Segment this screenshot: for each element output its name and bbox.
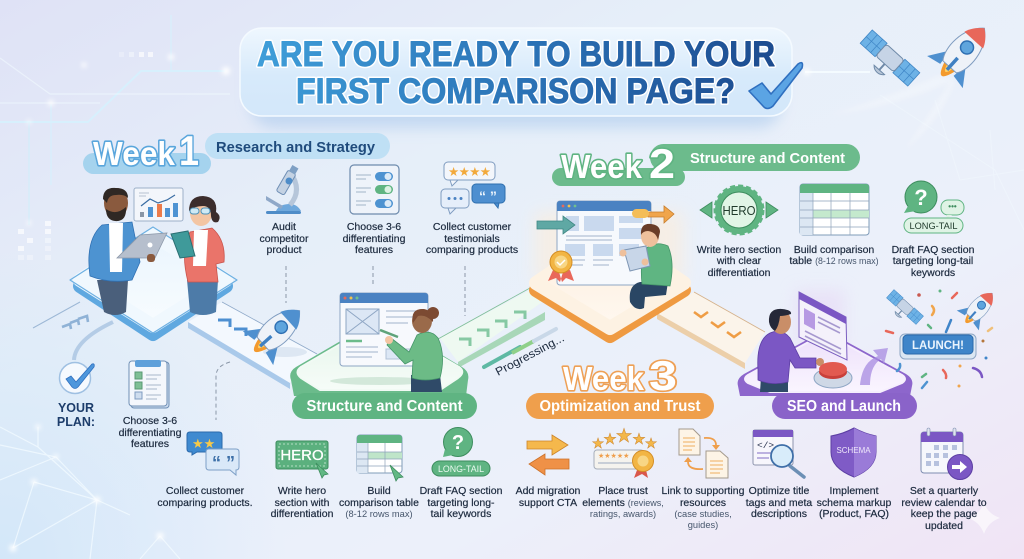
step: title tags: [746, 430, 812, 520]
step: comparison table: (8-12 rows max): [345, 509, 413, 519]
week 1 heading: Research and Strategy: [216, 139, 376, 156]
step: quarterly review: keep the page: [911, 508, 977, 520]
step: draft FAQ section: targeting long-tail: [893, 255, 973, 267]
title text: ARE YOU READY TO BUILD YOUR: [257, 35, 775, 74]
week 2 heading: [552, 140, 860, 187]
icon: toggle card: [350, 165, 399, 214]
your plan: YOUR: [58, 401, 94, 415]
step: supporting resources: Link to supporting: [662, 485, 745, 497]
step: FAQ section: targeting long-: [427, 497, 495, 509]
icon: chat bubbles: ★★: [192, 436, 215, 451]
step: trust elements: Place trust: [598, 485, 648, 497]
icon: review bubbles: “ ”: [479, 188, 497, 204]
step: audit competitor: Audit: [272, 221, 296, 233]
icon: swap arrows: [527, 435, 569, 475]
panel: structure and content label: Structure and Content: [306, 398, 462, 415]
launch celebration: [882, 283, 1003, 388]
icon: calendar with arrow: [921, 428, 972, 480]
step: comparison table: [339, 435, 419, 519]
step: hero section: section with: [275, 497, 330, 509]
illustration: woman drawing on window: [380, 307, 443, 392]
icon: medal: [548, 251, 574, 282]
icon: hero badge: HERO: [722, 204, 756, 218]
icon: linked documents: [679, 429, 728, 478]
step: trust elements: ratings, awards): [590, 509, 656, 519]
step: migration CTA: [516, 435, 581, 509]
step: plan features: [119, 360, 182, 450]
icon: stars and award: [592, 426, 657, 478]
step: plan features: features: [131, 438, 169, 450]
step: trust elements: elements (reviews,: [582, 497, 664, 509]
panel: SEO and launch label: [772, 393, 917, 419]
week 1 heading: 1: [179, 127, 199, 174]
title text: ARE YOU READY TO BUILD YOUR: [257, 35, 775, 74]
title text: FIRST COMPARISON PAGE?: [296, 72, 735, 111]
illustration: man with tablet: [620, 224, 672, 309]
step: quarterly review: Set a quarterly: [910, 485, 979, 497]
icon: table: [357, 435, 403, 481]
icon: clipboard: [129, 360, 169, 408]
step: title tags: descriptions: [751, 508, 807, 520]
icon: question bubble: [432, 428, 490, 476]
icon: FAQ bubbles: LONG-TAIL: [910, 221, 958, 232]
step: supporting resources: resources: [680, 497, 726, 509]
platform: week 3 purple: [738, 290, 912, 396]
connector: week 1 to week 2: [188, 302, 317, 389]
icon: FAQ bubbles: ?: [914, 185, 928, 210]
icon: plan check circle: [60, 362, 94, 394]
icon: stars and award: ★: [615, 426, 633, 447]
step: supporting resources: guides): [688, 520, 718, 530]
step: trust elements: [582, 426, 664, 519]
icon: question bubble: ?: [452, 432, 464, 454]
illustration: woman with clipboard: [171, 196, 224, 315]
step: draft FAQ section: [892, 181, 975, 279]
icon: FAQ bubbles: [904, 181, 964, 233]
icon: rocket top right: [830, 12, 1002, 150]
step: FAQ section: [420, 428, 503, 520]
step: schema markup: (Product, FAQ): [819, 508, 889, 520]
icon: red launch button: [814, 362, 852, 388]
step: audit competitor: [259, 165, 309, 256]
icon: stars and award: ★: [603, 431, 617, 448]
step: write hero section: with clear: [716, 255, 762, 267]
illustration: man pressing button: [758, 309, 824, 392]
week 3 heading: 3: [649, 352, 677, 399]
step: hero section: Write hero: [278, 485, 326, 497]
illustration: man with laptop: [89, 188, 167, 315]
step: migration CTA: support CTA: [519, 497, 577, 509]
step: plan testimonials: [157, 432, 253, 509]
step: plan features: Choose 3-6: [123, 415, 177, 427]
week 3 heading: Week: [563, 360, 645, 397]
week 1 heading: [83, 127, 390, 174]
step: comparison table: comparison table: [339, 497, 419, 509]
icon: orange arrow with tag: [632, 206, 674, 223]
step: schema markup: Implement: [829, 485, 879, 497]
step: FAQ section: Draft FAQ section: [420, 485, 503, 497]
step: schema markup: [817, 428, 892, 520]
step: schema markup: schema markup: [817, 497, 892, 509]
week 2 heading: 2: [649, 140, 675, 187]
step: collect testimonials: testimonials: [444, 233, 500, 245]
icon: chat bubbles: “ ”: [212, 453, 235, 473]
step: hero section: [271, 441, 334, 520]
week 3 heading: [526, 352, 714, 419]
step: build comparison table: table (8-12 rows max): [789, 255, 879, 267]
platform: week 2: [290, 293, 468, 396]
your plan: [57, 362, 95, 429]
icon: satellite top right: [853, 30, 920, 94]
icon: launch button: LAUNCH!: [912, 340, 964, 352]
step: write hero section: differentiation: [708, 267, 771, 279]
panel: structure and content label: [292, 393, 477, 419]
icon: stars and award: ★: [645, 435, 657, 451]
platform: week 1: [70, 188, 237, 334]
step: differentiating features: features: [355, 244, 393, 256]
step: title tags: Optimize title: [749, 485, 809, 497]
step: differentiating features: differentiating: [343, 233, 406, 245]
step: supporting resources: [662, 429, 745, 530]
week 1 heading: Week: [93, 135, 176, 172]
step: FAQ section: tail keywords: [431, 508, 491, 520]
icon: stars and award: ★★★★★: [598, 452, 629, 460]
title panel: [240, 28, 792, 128]
icon: review bubbles: ★★★★: [448, 165, 491, 179]
step: draft FAQ section: keywords: [911, 267, 955, 279]
week 2 heading: Structure and Content: [690, 150, 845, 167]
step: migration CTA: Add migration: [516, 485, 581, 497]
icon: comparison table: [800, 184, 869, 235]
icon: stars and award: ★: [592, 435, 604, 451]
step: collect testimonials: Collect customer: [433, 221, 512, 233]
icon: stars and award: ★: [632, 431, 646, 448]
step: collect testimonials: [426, 162, 518, 256]
step: collect testimonials: comparing products: [426, 244, 518, 256]
step: quarterly review: updated: [925, 520, 963, 532]
icon: teal arrow: [537, 216, 575, 234]
icon: title checkmark: [749, 63, 802, 108]
progress bar: Progressing...: [494, 332, 567, 379]
step: supporting resources: (case studies,: [674, 509, 732, 519]
illustration: webpage window: [557, 201, 651, 285]
icon: chat bubbles: [187, 432, 239, 475]
title text: FIRST COMPARISON PAGE?: [296, 72, 735, 111]
plan link line: [33, 302, 113, 360]
step: differentiating features: Choose 3-6: [347, 221, 401, 233]
step: build comparison table: Build comparison: [794, 244, 874, 256]
icon: rocket on connector: [239, 294, 315, 368]
step: comparison table: Build: [367, 485, 391, 497]
step: plan testimonials: Collect customer: [166, 485, 245, 497]
step: plan testimonials: comparing products.: [157, 497, 253, 509]
step: build comparison table: [789, 184, 879, 267]
icon: schema shield: SCHEMA: [836, 445, 871, 455]
step: hero section: differentiation: [271, 508, 334, 520]
illustration: browser panel: [799, 292, 847, 360]
icon: hero banner: HERO: [280, 447, 324, 464]
panel: SEO and launch label: SEO and Launch: [787, 398, 901, 415]
icon: purple curved arrow: [860, 348, 888, 385]
week 3 heading: Optimization and Trust: [540, 398, 700, 415]
step: plan features: differentiating: [119, 427, 182, 439]
illustration: dashboard card: [134, 188, 183, 221]
icon: question bubble: LONG-TAIL: [438, 464, 484, 475]
your plan: PLAN:: [57, 415, 95, 429]
connector: orange platform to purple platform: [657, 292, 765, 369]
step: write hero section: Write hero section: [697, 244, 781, 256]
illustration: wireframe window: [340, 293, 428, 366]
confetti: [886, 293, 992, 388]
icon: review bubbles: [441, 162, 505, 214]
week 2 heading: Week: [561, 148, 643, 185]
platform: week 2 orange: [535, 201, 684, 336]
step: differentiating features: [343, 165, 406, 256]
icon: rocket small: [955, 283, 1003, 333]
connector: week 2 to orange platform: [438, 288, 545, 368]
step: title tags: tags and meta: [746, 497, 812, 509]
step: write hero section: [697, 186, 781, 279]
icon: FAQ bubbles: •••: [948, 202, 957, 211]
icon: code window and magnifier: </>: [757, 440, 774, 451]
step: draft FAQ section: Draft FAQ section: [892, 244, 975, 256]
step: audit competitor: competitor: [259, 233, 309, 245]
step: quarterly review: review calendar to: [901, 497, 987, 509]
step: quarterly review: [901, 428, 987, 532]
dashed leaders: [216, 266, 465, 420]
title text: [257, 35, 775, 111]
icon: satellite small: [882, 290, 923, 329]
icon: microscope: [266, 165, 301, 214]
step: audit competitor: product: [266, 244, 302, 256]
